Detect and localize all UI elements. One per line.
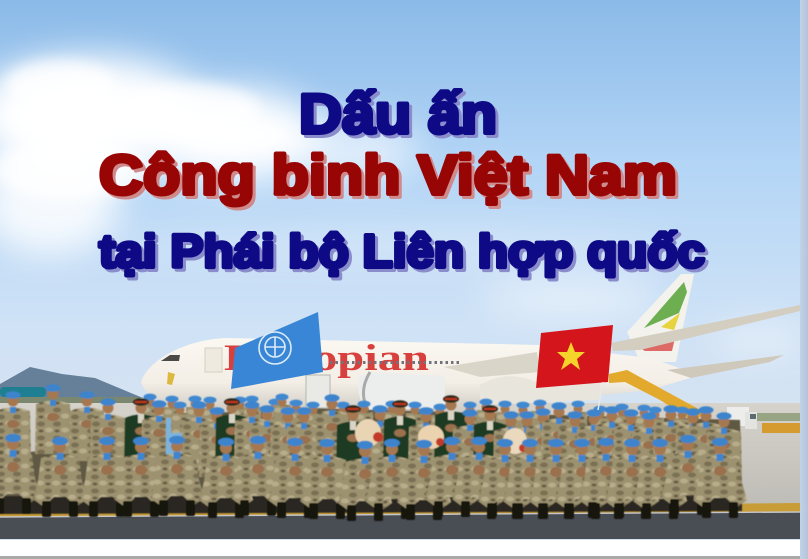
cabin door (205, 348, 222, 372)
passenger stairs (306, 375, 330, 408)
cockpit window (161, 355, 180, 361)
tail fin (627, 274, 694, 362)
flag pole (598, 382, 603, 410)
middle row of soldiers (0, 384, 742, 482)
title line 1: Dấu ấn (302, 85, 500, 148)
crowd of soldiers (0, 384, 747, 521)
far wing (611, 305, 800, 351)
boots shadow band (0, 496, 742, 514)
airport ground (0, 403, 800, 513)
windows (330, 361, 460, 364)
airline name: Ethiopian (224, 338, 430, 379)
Vietnam flag (536, 325, 613, 410)
yellow stairs (609, 370, 704, 422)
flower bouquets (355, 419, 527, 454)
title line 3: tại Phái bộ Liên hợp quốc (99, 225, 705, 277)
airplane (141, 274, 800, 422)
right border strip (800, 0, 808, 559)
truck (727, 407, 757, 429)
tailplane (667, 355, 784, 378)
crowd backdrop (0, 408, 742, 512)
star (557, 342, 585, 370)
title line 1: Dấu ấn (299, 82, 497, 145)
title line 2: Công binh Việt Nam (99, 143, 677, 206)
back rows of soldiers (141, 394, 691, 438)
front row of soldiers (0, 434, 747, 521)
title line 3: tại Phái bộ Liên hợp quốc (102, 228, 708, 280)
UN emblem (259, 332, 291, 364)
distant mountains and airport (0, 367, 796, 416)
runway (0, 512, 800, 539)
fuselage (141, 338, 700, 412)
title (99, 82, 708, 280)
bottom edge (0, 556, 800, 559)
UN flag (231, 312, 323, 389)
title line 2: Công binh Việt Nam (102, 146, 680, 209)
engines (358, 372, 445, 410)
yellow kerb (0, 503, 800, 518)
nose emblem (167, 372, 175, 385)
near wing (444, 352, 540, 377)
luggage cart (762, 423, 800, 433)
